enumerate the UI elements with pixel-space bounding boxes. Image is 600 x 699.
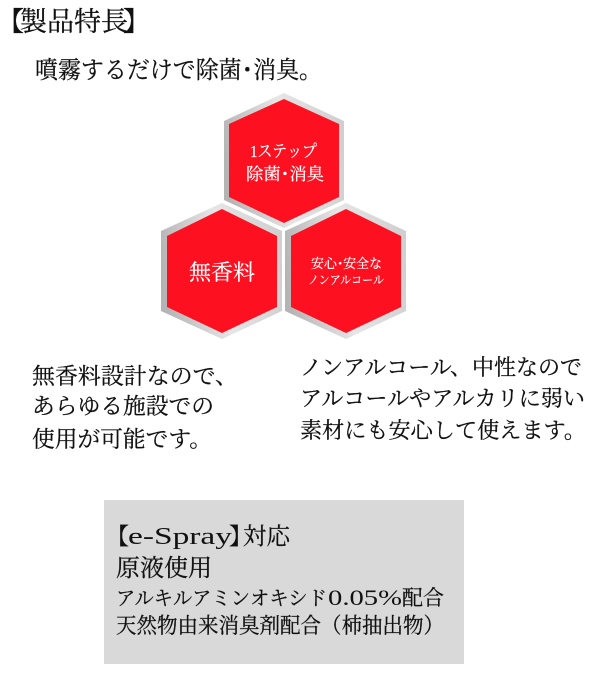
- hexagon: 1 step: 1ステップ: [250, 142, 317, 161]
- panel: e-Spray spec box: 天然物由来消臭剤配合（柿抽出物）: [116, 614, 444, 638]
- left description: 無香料設計なので、: [32, 364, 238, 389]
- right description: ノンアルコール、中性なので: [300, 355, 582, 380]
- title: 】: [123, 7, 150, 37]
- hexagon: fragrance free: 無香料: [189, 260, 255, 285]
- panel: e-Spray spec box: e-Spray: [128, 524, 232, 550]
- title: 製品特長: [20, 7, 128, 37]
- panel: e-Spray spec box: 【: [106, 524, 129, 549]
- hexagon: alcohol free: 安心･安全な: [311, 256, 382, 271]
- hexagon: alcohol free: ノンアルコール: [308, 273, 384, 287]
- hexagon: 1 step: 除菌･消臭: [246, 165, 324, 184]
- panel: e-Spray spec box: 対応: [243, 523, 291, 550]
- right description: [300, 355, 586, 443]
- left description: 使用が可能です。: [32, 427, 212, 452]
- left description: あらゆる施設での: [32, 394, 214, 419]
- panel: e-Spray spec box: [104, 500, 464, 664]
- right description: 素材にも安心して使えます。: [300, 418, 586, 443]
- panel: e-Spray spec box: アルキルアミンオキシド: [116, 588, 327, 610]
- lead text: 噴霧するだけで除菌･消臭。: [35, 57, 322, 84]
- right description: アルコールやアルカリに弱い: [300, 386, 585, 411]
- hexagon: fragrance free: [161, 203, 282, 339]
- panel: e-Spray spec box: 】: [229, 524, 252, 549]
- panel: e-Spray spec box: 原液使用: [116, 555, 212, 582]
- hexagon: 1 step: [224, 93, 344, 228]
- hexagon: alcohol free: [285, 203, 406, 339]
- left description: [32, 364, 238, 452]
- panel: e-Spray spec box: 0.05%: [328, 585, 402, 610]
- panel: e-Spray spec box: 配合: [402, 586, 444, 610]
